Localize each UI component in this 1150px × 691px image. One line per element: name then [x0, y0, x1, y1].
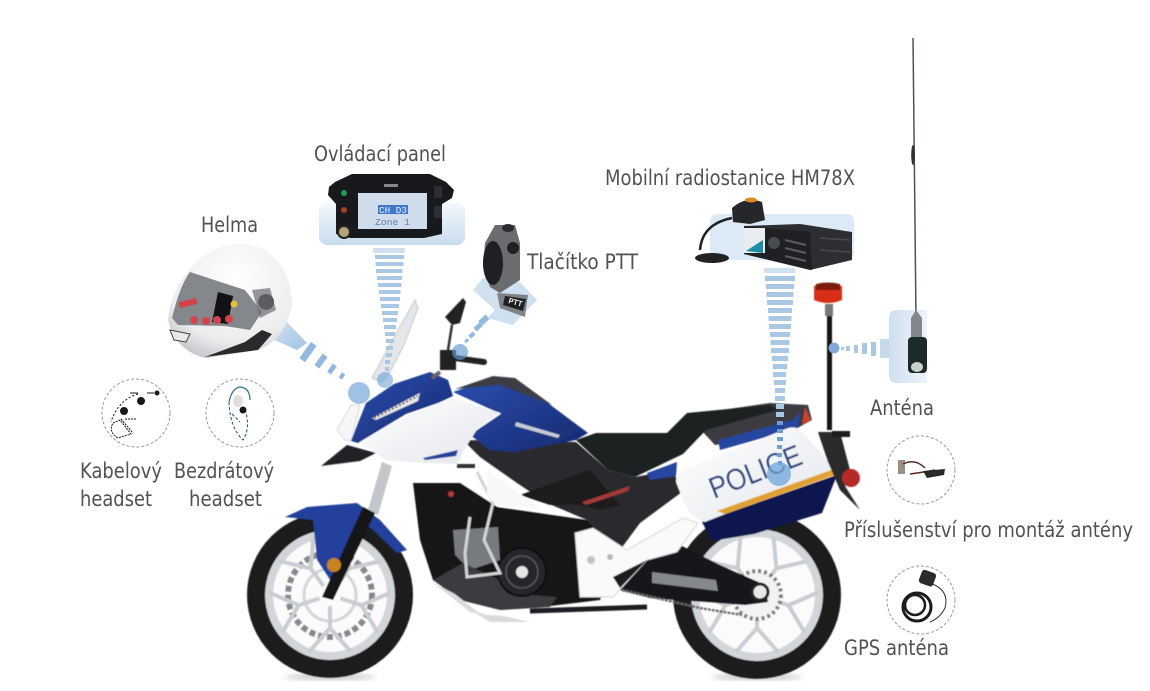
- label: Kabelový headset: [80, 459, 162, 511]
- seat: [576, 405, 778, 477]
- label: GPS anténa: GPS anténa: [844, 636, 949, 660]
- label: Kabelový headset: headset: [80, 487, 152, 511]
- label: Bezdrátový headset: [174, 459, 274, 511]
- microphone: [732, 200, 765, 224]
- label: Bezdrátový headset: headset: [189, 487, 262, 511]
- light panel: [473, 278, 537, 325]
- front wheel: [247, 512, 413, 678]
- accessory: wireless headset: [206, 379, 274, 447]
- panel background: [710, 214, 854, 260]
- handlebar and mirror: [432, 298, 484, 378]
- panel background: [319, 203, 465, 245]
- accessory: GPS antenna: [887, 566, 955, 634]
- beam: radio: [764, 268, 795, 486]
- police text: POLICE: [704, 439, 807, 506]
- control head device: CH D3: [379, 205, 407, 216]
- panel: radio: [695, 198, 854, 270]
- swingarm and chain: [620, 545, 768, 615]
- beam: control panel: [373, 248, 405, 388]
- radio unit: [695, 198, 852, 270]
- accessory: antenna mount kit: [887, 436, 955, 504]
- motorcycle: [247, 282, 860, 680]
- control head device: Zone 1: [375, 217, 410, 228]
- wheel shadows: [285, 674, 802, 680]
- label: Ovládací panel: Ovládací panel: [314, 142, 446, 166]
- front fender and fork: [285, 462, 407, 600]
- antenna panel: [889, 310, 927, 383]
- accessory: wired headset: [102, 379, 170, 447]
- antenna: [889, 38, 927, 383]
- engine: [413, 464, 647, 622]
- tail: [647, 403, 812, 480]
- beam: helmet: [270, 320, 370, 404]
- windscreen: [372, 300, 418, 382]
- PTT button: [473, 224, 537, 325]
- white fairing: [337, 398, 501, 464]
- label: Bezdrátový headset: Bezdrátový: [174, 459, 274, 483]
- helmet: [168, 244, 292, 358]
- side panel black: [463, 440, 682, 550]
- tank: [453, 376, 588, 452]
- rear wheel: [673, 511, 841, 679]
- label: Anténa: Anténa: [870, 396, 934, 420]
- panel: control panel: [319, 174, 465, 245]
- label: Kabelový headset: Kabelový: [80, 459, 162, 483]
- black beak: [321, 445, 376, 466]
- beam: antenna: [828, 339, 889, 358]
- label: Mobilní radiostanice HM78X: Mobilní radiostanice HM78X: [605, 166, 855, 190]
- pole with rear light: [814, 282, 860, 510]
- label: Tlačítko PTT: Tlačítko PTT: [526, 250, 638, 274]
- label: Helma: Helma: [201, 213, 258, 237]
- beam: PTT: [452, 314, 490, 360]
- PTT button: PTT: [507, 296, 523, 309]
- control head device: [328, 174, 454, 238]
- side case: [676, 427, 837, 541]
- white frame: [575, 518, 698, 597]
- blue nose: [351, 372, 453, 443]
